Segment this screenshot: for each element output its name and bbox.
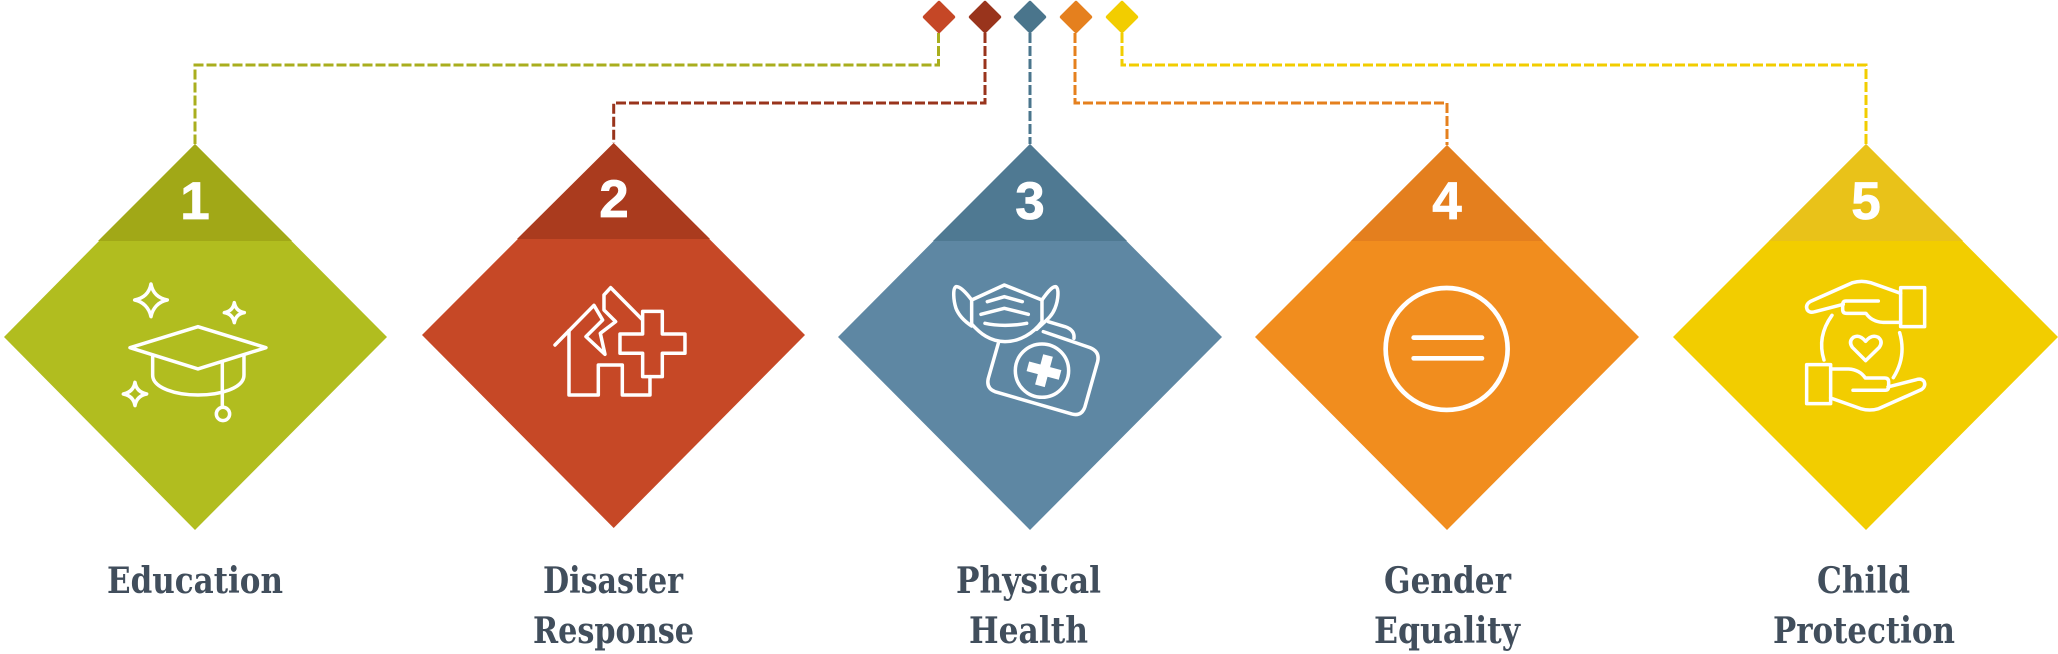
number 1: 1 <box>180 172 210 231</box>
label: Gender Equality <box>1374 559 1522 652</box>
diamond background <box>4 144 387 530</box>
label: Physical Health <box>956 559 1101 652</box>
label: Disaster Response: Response <box>533 609 694 652</box>
connector: physical health <box>1028 33 1032 144</box>
number band <box>933 144 1127 241</box>
number 3: 3 <box>1015 172 1045 231</box>
number band <box>1769 144 1963 241</box>
top marker: orange diamond <box>1059 0 1093 34</box>
icon: hands protecting heart <box>1807 281 1925 410</box>
label: Child Protection: Child <box>1817 559 1910 602</box>
top marker: red diamond <box>922 0 956 34</box>
diamond background <box>422 143 805 528</box>
panel: disaster response <box>422 143 805 652</box>
top marker: yellow diamond <box>1105 0 1139 34</box>
panel: child protection <box>1673 144 2058 652</box>
diamond background <box>1255 145 1639 530</box>
panel: physical health <box>838 144 1222 652</box>
label: Child Protection <box>1773 559 1955 652</box>
number 5: 5 <box>1851 172 1881 231</box>
icon: damaged house with cross <box>555 288 685 395</box>
label: Gender Equality: Gender <box>1384 559 1512 602</box>
label: Disaster Response: Disaster <box>543 559 684 602</box>
number band <box>517 143 710 239</box>
top marker: blue diamond <box>1013 0 1047 34</box>
icon: graduation cap <box>123 284 266 421</box>
diamond background <box>838 144 1222 530</box>
icon: mask and first aid kit <box>954 285 1098 415</box>
connector: education <box>195 33 938 144</box>
number band <box>1351 145 1543 241</box>
label: Education: Education <box>107 559 283 602</box>
label: Physical Health: Health <box>969 609 1088 652</box>
connector: disaster response <box>614 33 985 143</box>
label: Gender Equality: Equality <box>1374 609 1522 652</box>
top marker: dark red diamond <box>968 0 1002 34</box>
connector: child protection <box>1122 33 1866 144</box>
panel: gender equality <box>1255 145 1639 652</box>
label: Disaster Response <box>533 559 694 652</box>
number 2: 2 <box>599 170 629 229</box>
icon: equals sign in circle <box>1386 288 1508 410</box>
panel: education <box>4 144 387 602</box>
number 4: 4 <box>1432 172 1462 231</box>
label: Child Protection: Protection <box>1773 609 1955 652</box>
number band <box>98 144 292 241</box>
label: Physical Health: Physical <box>956 559 1101 602</box>
diamond background <box>1673 144 2058 530</box>
connector: gender equality <box>1075 33 1447 145</box>
